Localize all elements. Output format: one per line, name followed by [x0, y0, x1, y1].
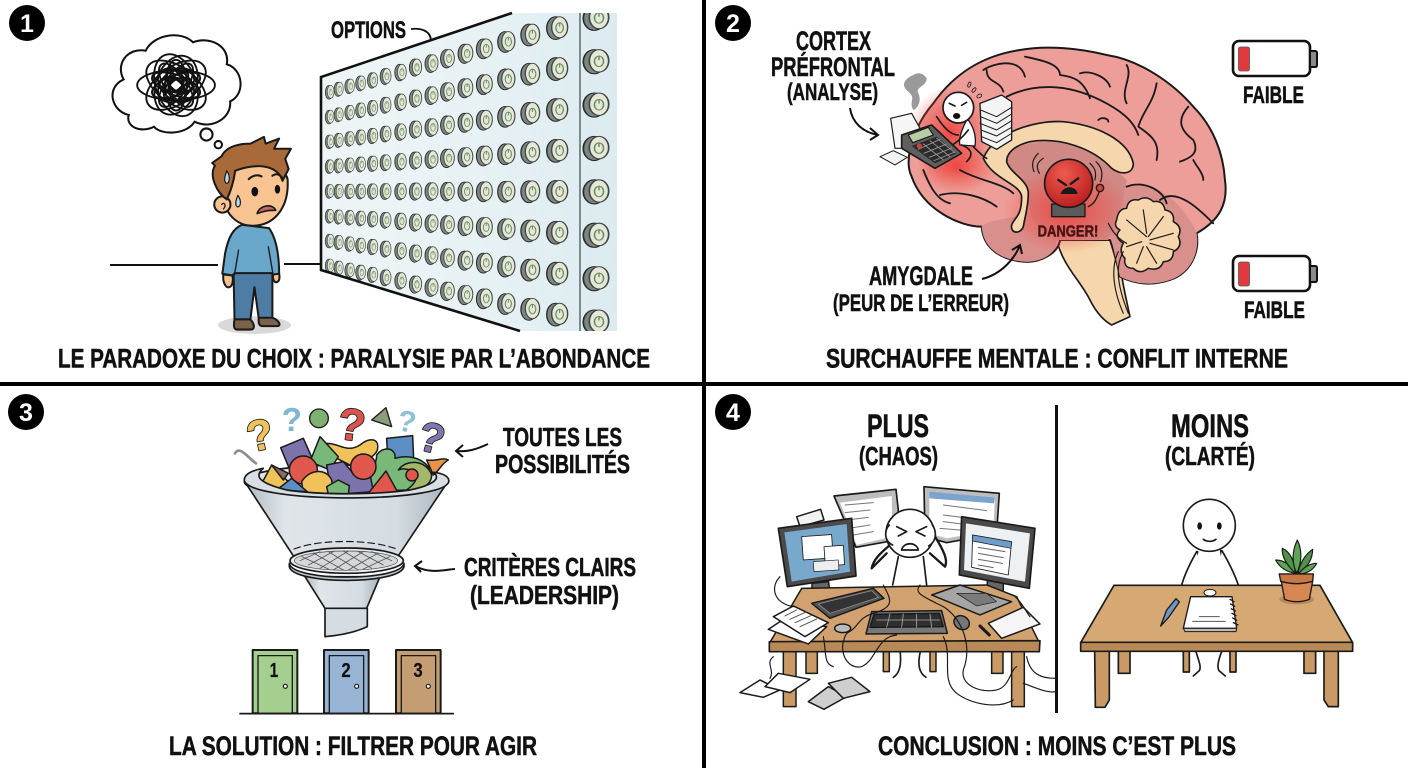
door 1: 1: [270, 659, 278, 682]
hair: [212, 137, 291, 199]
alarm bell: [1033, 153, 1104, 217]
loose papers on floor: [740, 673, 870, 709]
door 3: [396, 650, 441, 713]
brain stem: [1057, 233, 1130, 325]
funnel cone: [244, 481, 448, 558]
door 2: [324, 650, 369, 713]
panel 3: doors: [239, 650, 454, 714]
left monitor: [778, 518, 856, 600]
shadow: [218, 316, 291, 334]
badge 1: [9, 5, 45, 41]
label: toutes les possibilites: [456, 424, 630, 479]
worried person: [212, 137, 291, 334]
badge 3: 3: [19, 399, 33, 427]
panel 1: floor line: [110, 264, 321, 265]
floating question marks: ?: [242, 410, 278, 462]
notepad: [1183, 597, 1238, 632]
label: cortex prefrontal: CORTEX: [796, 26, 871, 56]
panel 2: brain illustration: [880, 48, 1226, 325]
notebook: [988, 607, 1040, 638]
label: cortex prefrontal: [771, 26, 895, 140]
paper stack: [980, 95, 1012, 149]
floor: [239, 711, 454, 716]
badge 1: 1: [20, 10, 34, 38]
panel 2 title: SURCHAUFFE MENTALE : CONFLIT INTERNE: [826, 344, 1288, 374]
danger text: DANGER!: [1038, 224, 1098, 241]
mouth: [257, 206, 276, 214]
panel 3: funnel: [235, 398, 450, 637]
hands: [223, 274, 233, 287]
dashed seam: [294, 541, 397, 549]
label: cortex prefrontal: (ANALYSE): [787, 79, 878, 106]
sweat drops: [225, 171, 229, 183]
panel 4 divider: [1055, 405, 1058, 713]
panel 4 title: CONCLUSION : MOINS C’EST PLUS: [878, 731, 1236, 761]
panel 1 title: LE PARADOXE DU CHOIX : PARALYSIE PAR L’ABONDANCE: [58, 344, 650, 374]
face: [221, 162, 288, 226]
hands: [1204, 589, 1216, 596]
keyboards: [812, 588, 884, 618]
shapes: [260, 436, 448, 494]
badge 3: [8, 394, 44, 430]
battery top: FAIBLE: [1243, 82, 1304, 109]
stick legs: [1193, 652, 1225, 676]
panel 3 title: LA SOLUTION : FILTRER POUR AGIR: [169, 731, 537, 761]
label: amygdale: (PEUR DE L’ERREUR): [833, 290, 1009, 317]
glow amygdala: [1003, 167, 1130, 253]
battery bottom: FAIBLE: [1244, 297, 1305, 324]
stick legs: [893, 650, 926, 677]
eyes and brows: [251, 187, 258, 196]
chaotic desk scene: [740, 487, 1055, 709]
desk near legs: [1095, 651, 1338, 707]
heading plus: (CHAOS): [859, 443, 938, 471]
plant: [1276, 540, 1317, 604]
corpus callosum: [983, 122, 1133, 232]
stress marks: [967, 82, 982, 99]
stick figure: [1182, 499, 1238, 593]
battery bottom: [1233, 256, 1317, 324]
papers under calculator: [891, 113, 920, 148]
right monitor: [959, 517, 1035, 595]
floating question marks: ?: [334, 398, 369, 452]
battery top: [1233, 41, 1317, 109]
funnel rim: [244, 468, 449, 498]
stressed stick figure: [872, 509, 946, 585]
desk top: [770, 585, 1038, 642]
torso and arms: [222, 225, 279, 275]
mesh filter ring: [289, 563, 404, 580]
badge 2: [715, 5, 751, 41]
sulci: [923, 57, 1213, 223]
floating question marks: ?: [413, 412, 450, 464]
heading moins: (CLARTÉ): [1165, 442, 1255, 471]
label: options: OPTIONS: [331, 17, 406, 44]
laptop: [932, 585, 1012, 615]
legs: [234, 270, 272, 319]
floating question marks: ?: [282, 402, 302, 439]
desk far legs: [1118, 651, 1316, 673]
badge 4: 4: [726, 399, 740, 427]
door 2: 2: [341, 659, 351, 682]
temporal lower lobe: [982, 210, 1057, 262]
door 3: 3: [413, 659, 423, 682]
heading moins: [1165, 408, 1255, 471]
calm desk scene: [1081, 499, 1353, 707]
heading plus: PLUS: [867, 408, 929, 444]
floating question marks: [242, 398, 450, 464]
floating question marks: ?: [395, 404, 419, 440]
label: criteres clairs: [415, 553, 636, 610]
glow prefrontal: [908, 87, 992, 180]
heading moins: MOINS: [1171, 408, 1249, 444]
cerebellum: [1116, 198, 1180, 272]
cortex outer: [909, 48, 1226, 284]
badge 4: [715, 394, 751, 430]
label: criteres clairs: (LEADERSHIP): [470, 582, 619, 610]
badge 2: 2: [726, 10, 740, 38]
inner mid region: [1007, 142, 1127, 240]
funnel body behind shapes: [244, 465, 448, 498]
desk legs: [783, 650, 1024, 707]
panel 1: wall of options: [321, 6, 617, 334]
shoes: [234, 319, 254, 330]
lower spout: [305, 577, 380, 608]
label: toutes les possibilites: TOUTES LES: [503, 424, 622, 452]
heading plus: [859, 408, 938, 471]
pen: [1161, 599, 1179, 626]
smoke: [904, 73, 927, 110]
stick figure: [937, 92, 987, 162]
cables: [770, 577, 1055, 705]
door 1: [253, 650, 297, 713]
label: criteres clairs: CRITÈRES CLAIRS: [464, 553, 636, 582]
calculator: [902, 125, 962, 168]
label: toutes les possibilites: POSSIBILITÉS: [495, 450, 630, 479]
table top: [1081, 585, 1353, 643]
papers: [768, 622, 827, 644]
back monitors: [797, 487, 999, 547]
label: cortex prefrontal: PRÉFRONTAL: [771, 52, 895, 82]
label: amygdale: AMYGDALE: [869, 261, 973, 291]
label: amygdale: [833, 245, 1022, 317]
mice: [835, 624, 851, 633]
thought bubble with tangled scribble: [113, 35, 241, 148]
